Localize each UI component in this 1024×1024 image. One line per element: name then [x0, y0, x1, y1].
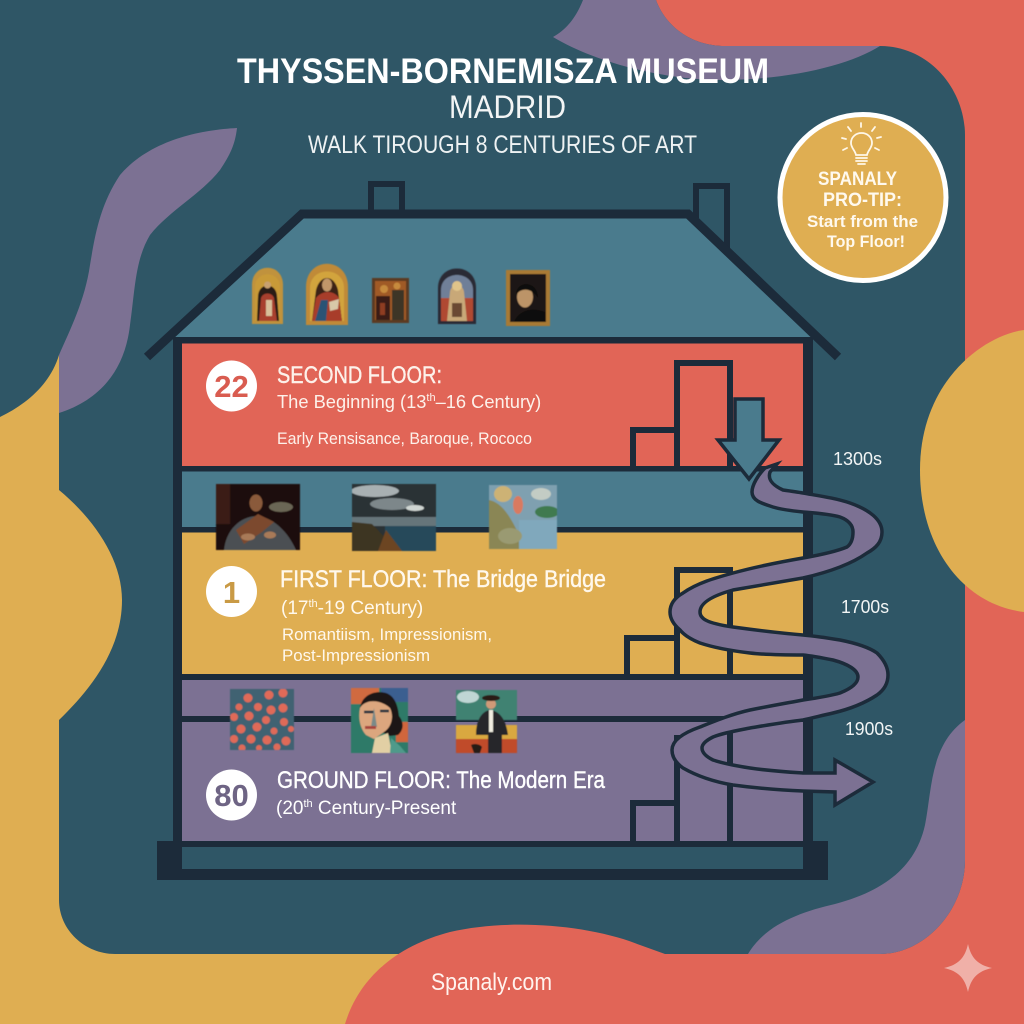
period: first floor: th [308, 598, 318, 610]
painting: impressionist garden [489, 485, 559, 549]
staircase: ground floor [633, 730, 730, 842]
period: ground floor: (20 [276, 798, 303, 819]
staircase: first floor [627, 570, 730, 675]
pro-tip text: SPANALY [818, 169, 897, 190]
period: the beginning: The Beginning (13 [277, 391, 426, 412]
heading: ground floor: GROUND FLOOR: The Modern Era [277, 767, 606, 794]
painting: man with lute [216, 484, 300, 550]
icon: light bulb [842, 123, 881, 164]
pro-tip text: Top Floor! [827, 232, 905, 251]
styles: first floor: Romantiism, Impressionism, [282, 625, 492, 644]
pro-tip text: Start from the [807, 212, 918, 231]
background: right yellow shape [920, 330, 1024, 612]
painting: stormy landscape [351, 484, 436, 551]
painting: icon 1 [252, 268, 283, 324]
house [147, 184, 838, 880]
painting: dots [230, 688, 294, 752]
panel: gallery band upper [180, 470, 805, 528]
painting: icon 4 [438, 268, 476, 324]
styles: second floor: Early Rensisance, Baroque, Rococo [277, 429, 532, 448]
painting: icon 3 [372, 278, 409, 323]
painting: man with hat [456, 690, 517, 753]
heading: second floor: SECOND FLOOR: [277, 362, 442, 389]
subtitle: city: MADRID [449, 89, 566, 125]
floor number badge: 1: 1 [223, 575, 240, 610]
panel: foundation [180, 846, 805, 870]
title: THYSSEN-BORNEMISZA MUSEUM [237, 52, 769, 91]
roof [172, 214, 815, 337]
heading: first floor: FIRST FLOOR: The Bridge Bridge [280, 566, 606, 593]
first floor paintings [216, 484, 559, 551]
first floor text block [206, 566, 606, 665]
panel: first floor [180, 531, 805, 675]
floor number badge: 22: 22 [214, 369, 249, 404]
timeline ribbon arrow [670, 464, 888, 805]
panel: ground floor [180, 679, 805, 842]
structure beams and walls [157, 337, 828, 880]
icon: sparkle star [944, 944, 992, 992]
floor number badge: 80 [206, 770, 257, 820]
floor number badge: 80: 80 [214, 778, 249, 813]
period: first floor: (17 [281, 598, 308, 619]
pro-tip text [807, 169, 918, 251]
panel: second floor [180, 343, 805, 467]
background: top purple shape [553, 0, 880, 80]
second floor text block [206, 360, 541, 448]
label: 1300s: 1300s [833, 449, 882, 469]
period: ground floor: th [303, 798, 313, 810]
floor number badge: 1 [206, 566, 257, 617]
background: left purple shape [59, 128, 237, 413]
floor number badge: 22 [206, 360, 257, 412]
icon: down arrow [718, 399, 779, 479]
label: 1700s: 1700s [841, 597, 889, 617]
footer website: Spanaly.com [431, 969, 552, 996]
second floor paintings [252, 264, 550, 326]
painting: portrait [506, 270, 550, 326]
pro-tip text: PRO-TIP: [823, 190, 902, 211]
subtitle: tagline: WALK TIROUGH 8 CENTURIES OF ART [308, 131, 697, 159]
period: the beginning: th [426, 392, 436, 404]
background: bottom red shape [345, 925, 760, 1024]
period: the beginning: –16 Century) [436, 391, 541, 412]
background: bottom right purple shape [748, 720, 965, 954]
styles: first floor continued: Post-Impressionism [282, 646, 430, 665]
staircase: second floor [633, 363, 730, 467]
chimneys [371, 184, 727, 250]
period: first floor: -19 Century) [318, 598, 423, 619]
roof outline [147, 214, 838, 357]
ground floor text block [206, 767, 606, 820]
painting: icon 2 [306, 264, 348, 325]
painting: cubist portrait [351, 688, 408, 753]
ground floor paintings [230, 688, 517, 753]
pro-tip callout [780, 114, 946, 280]
background: left yellow shape [0, 355, 400, 1024]
period: ground floor: Century-Present [313, 798, 457, 819]
label: 1900s: 1900s [845, 719, 893, 739]
